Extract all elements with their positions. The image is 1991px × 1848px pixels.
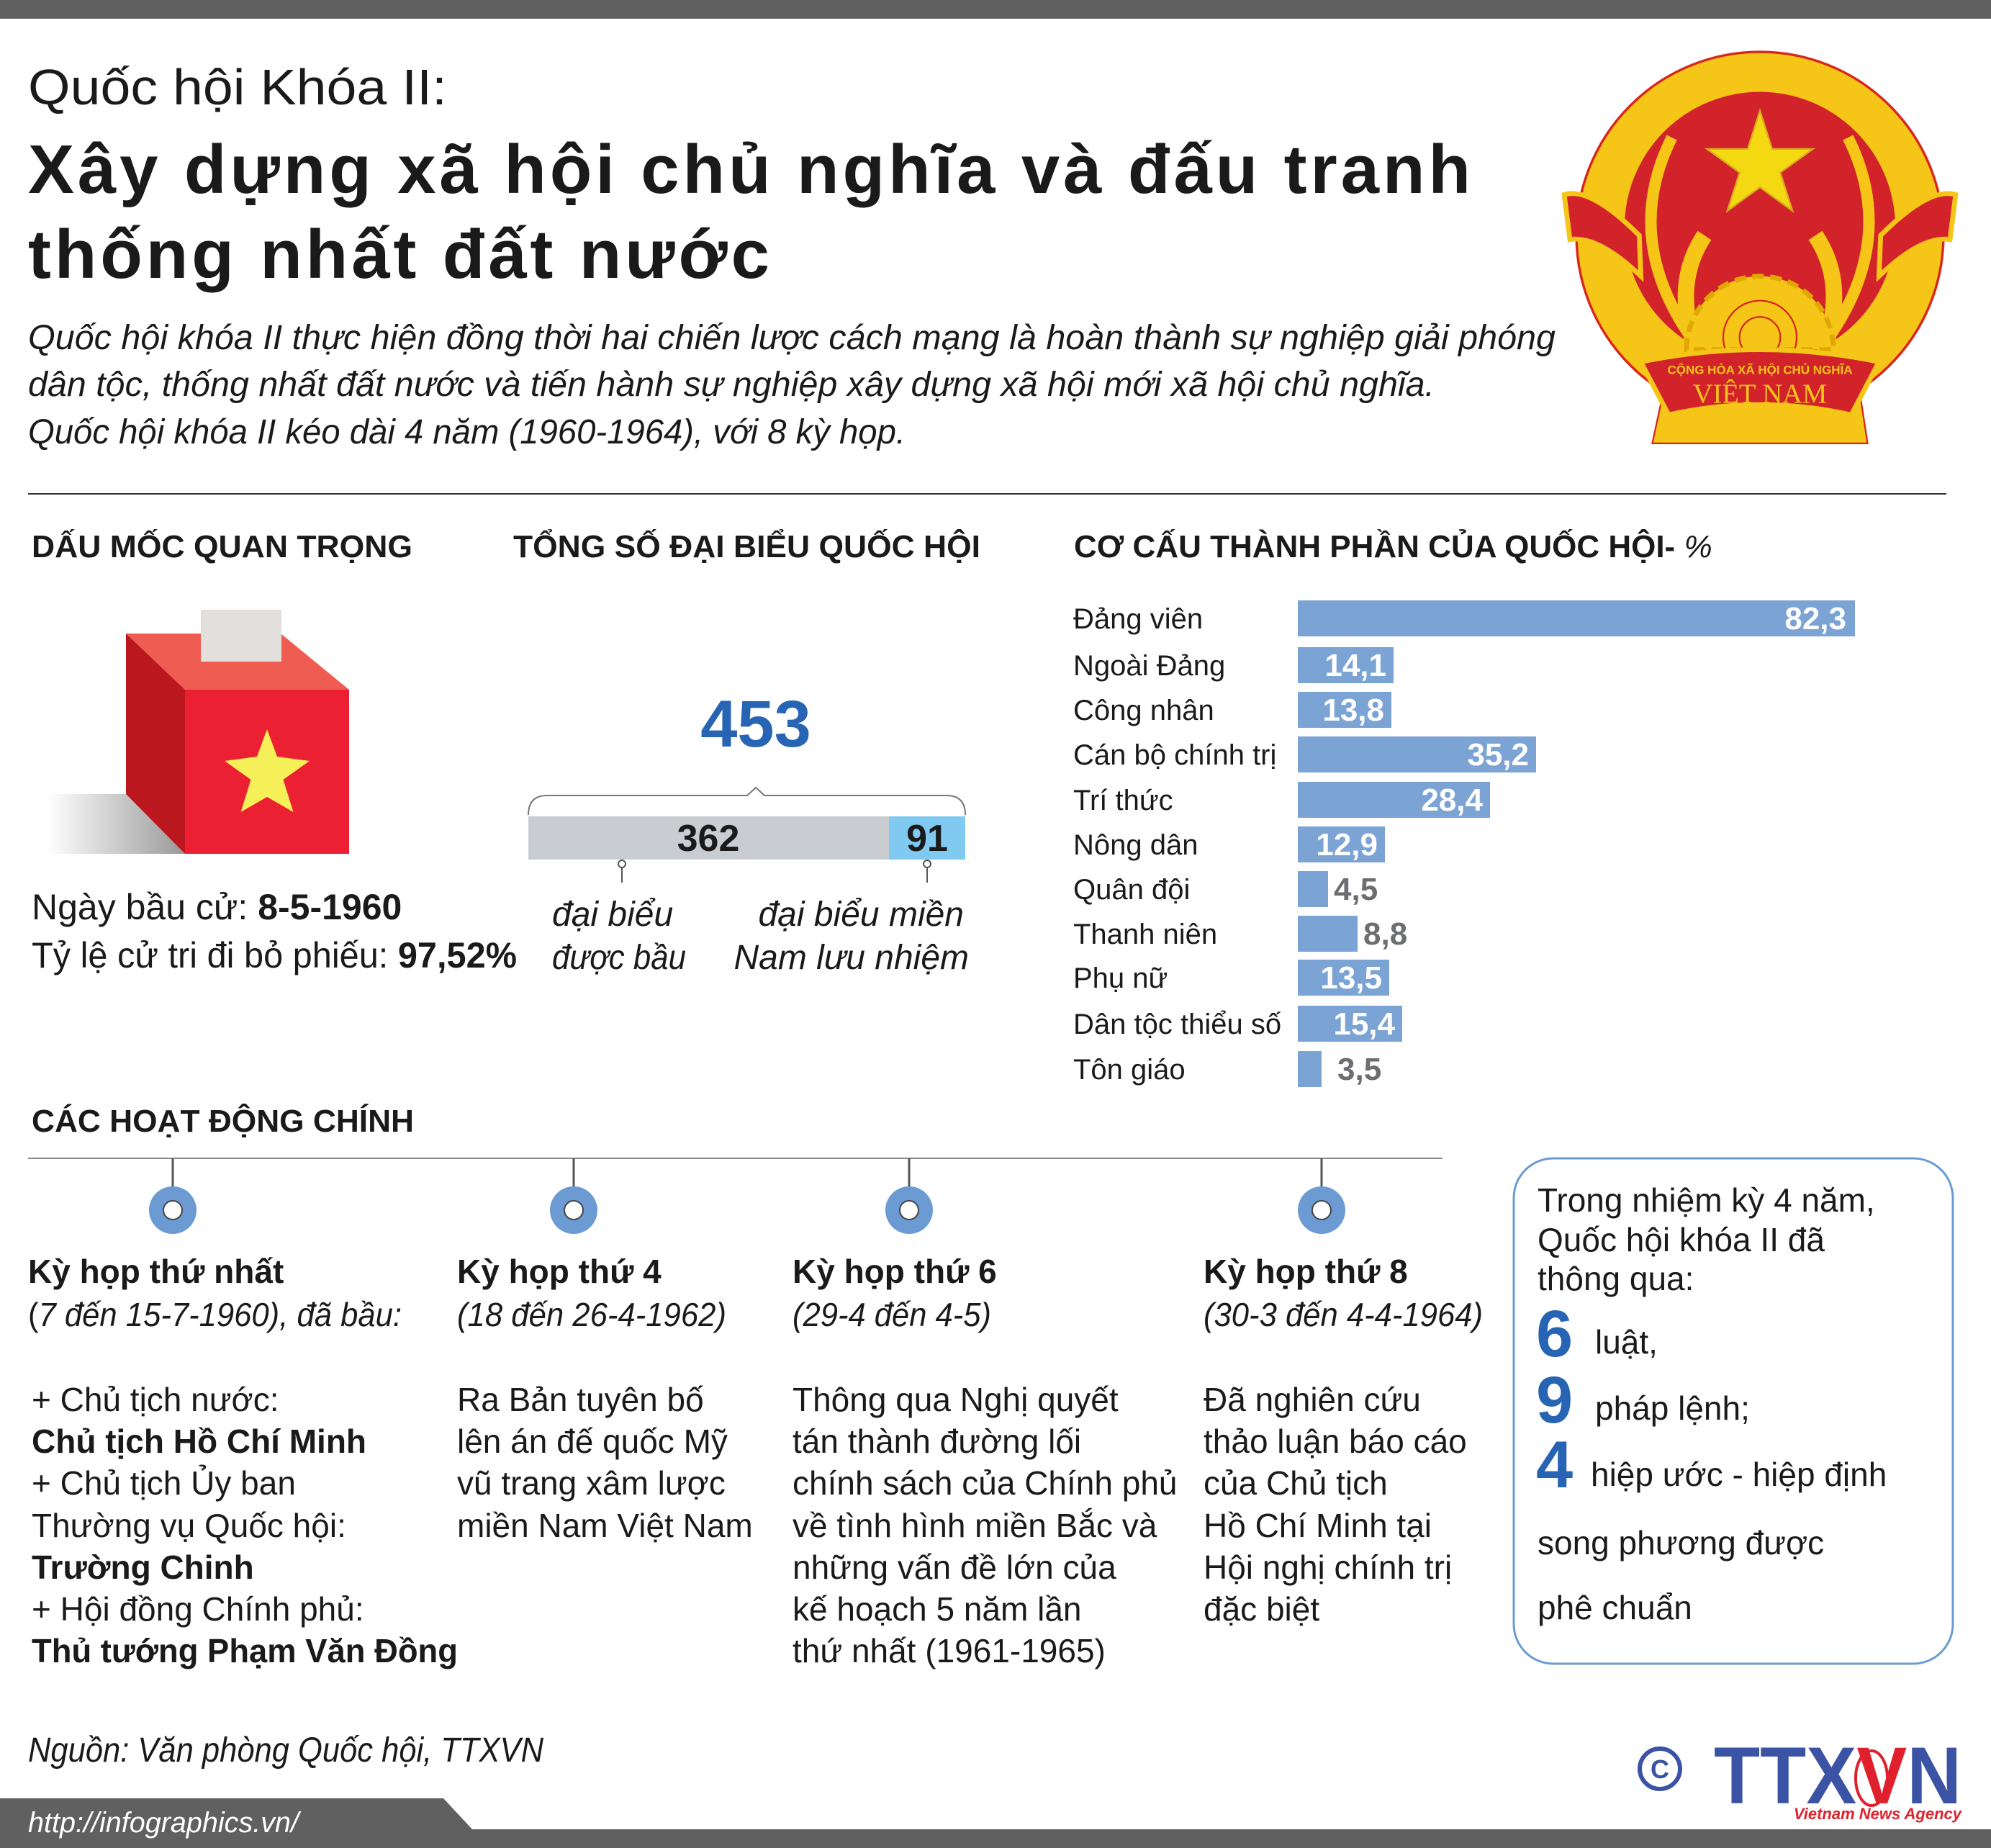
total deputies chart: 453 [700, 688, 811, 761]
total deputies chart: 362 [677, 818, 739, 860]
bar chart: composition: Nông dân [1073, 829, 1198, 861]
session 8: thảo luận báo cáo [1204, 1423, 1467, 1460]
session 6: Thông qua Nghị quyết [793, 1381, 1119, 1418]
callout: laws passed: Trong nhiệm kỳ 4 năm, [1538, 1181, 1875, 1219]
bar chart: composition [1073, 600, 1855, 1087]
callout: laws passed: 9 [1536, 1364, 1573, 1437]
callout: laws passed: pháp lệnh; [1595, 1389, 1750, 1427]
bar chart: composition: 15,4 [1333, 1006, 1396, 1042]
bar chart: composition: Cán bộ chính trị [1073, 739, 1276, 771]
bar chart: composition: 4,5 [1334, 872, 1378, 907]
session 6: thứ nhất (1961-1965) [793, 1632, 1106, 1669]
session 8: Hồ Chí Minh tại [1204, 1507, 1432, 1544]
session 4: miền Nam Việt Nam [457, 1507, 753, 1544]
icon: national emblem [1564, 52, 1956, 443]
callout: laws passed: song phương được [1538, 1524, 1824, 1561]
bar chart: composition: Trí thức [1073, 785, 1173, 816]
session 4: (18 đến 26-4-1962) [457, 1296, 726, 1333]
heading: milestones: DẤU MỐC QUAN TRỌNG [32, 528, 412, 564]
session 1: Kỳ họp thứ nhất [28, 1253, 284, 1290]
election facts [32, 887, 517, 975]
footer bar with url: http://infographics.vn/ [28, 1807, 302, 1839]
bar chart: composition: 35,2 [1467, 737, 1529, 772]
bar chart: composition: Phụ nữ [1073, 963, 1168, 994]
callout: laws passed: thông qua: [1538, 1260, 1694, 1297]
session 4: vũ trang xâm lược [457, 1464, 726, 1502]
total deputies chart [528, 688, 969, 977]
session 6: (29-4 đến 4-5) [793, 1296, 991, 1333]
election facts: Ngày bầu cử: 8-5-1960 [32, 887, 402, 927]
session 4: lên án đế quốc Mỹ [457, 1423, 728, 1460]
total deputies chart: đại biểu [552, 896, 673, 934]
heading: total deputies: TỔNG SỐ ĐẠI BIỂU QUỐC HỘI [513, 528, 980, 564]
intro text: dân tộc, thống nhất đất nước và tiến hành sự nghiệp xây dựng xã hội mới xã hội chủ nghĩa. [28, 366, 1435, 404]
callout: laws passed: 4 [1536, 1428, 1573, 1502]
session 8: (30-3 đến 4-4-1964) [1204, 1296, 1483, 1333]
title: Quốc hội Khóa II: [28, 59, 447, 115]
session 6: tán thành đường lối [793, 1423, 1081, 1460]
session 8: Hội nghị chính trị [1204, 1549, 1452, 1586]
bar chart: composition: 13,5 [1320, 960, 1382, 996]
session 1: Thủ tướng Phạm Văn Đồng [32, 1632, 458, 1669]
logo: TTXVN: Vietnam News Agency [1794, 1805, 1963, 1823]
intro text: Quốc hội khóa II kéo dài 4 năm (1960-1964), với 8 kỳ họp. [28, 413, 906, 451]
session 1: Thường vụ Quốc hội: [32, 1507, 346, 1544]
bar chart: composition: 82,3 [1784, 601, 1846, 636]
session 6: những vấn đề lớn của [793, 1549, 1116, 1586]
session 4 [457, 1253, 753, 1544]
session 1: Trường Chinh [32, 1549, 254, 1586]
callout: laws passed: phê chuẩn [1538, 1589, 1692, 1626]
total deputies chart: 91 [906, 818, 948, 860]
session 1: (7 đến 15-7-1960), đã bầu: [28, 1296, 402, 1333]
callout: laws passed [1514, 1158, 1953, 1664]
timeline [28, 1158, 1443, 1234]
session 6: Kỳ họp thứ 6 [793, 1253, 997, 1290]
title: Xây dựng xã hội chủ nghĩa và đấu tranh [28, 131, 1471, 208]
session 1: Chủ tịch Hồ Chí Minh [32, 1423, 366, 1460]
session 1: + Chủ tịch Ủy ban [32, 1464, 296, 1502]
heading: composition: CƠ CẤU THÀNH PHẦN CỦA QUỐC HỘI- % [1074, 528, 1712, 564]
session 6: kế hoạch 5 năm lần [793, 1590, 1081, 1628]
session 8: Đã nghiên cứu [1204, 1381, 1421, 1418]
session 4: Kỳ họp thứ 4 [457, 1253, 662, 1290]
session 1: + Hội đồng Chính phủ: [32, 1590, 364, 1628]
bar chart: composition: 12,9 [1316, 827, 1378, 862]
intro text: Quốc hội khóa II thực hiện đồng thời hai chiến lược cách mạng là hoàn thành sự nghiệp giải phóng [28, 319, 1556, 357]
total deputies chart: Nam lưu nhiệm [733, 939, 969, 977]
session 4: Ra Bản tuyên bố [457, 1381, 704, 1418]
bar chart: composition: Quân đội [1073, 874, 1190, 906]
bar chart: composition: Thanh niên [1073, 919, 1217, 950]
session 6 [793, 1253, 1177, 1669]
heading: main activities: CÁC HOẠT ĐỘNG CHÍNH [32, 1102, 414, 1139]
bar chart: composition: Ngoài Đảng [1073, 650, 1225, 682]
total deputies chart: đại biểu miền [758, 896, 964, 934]
session 1 [28, 1253, 458, 1669]
bar chart: composition: 14,1 [1324, 648, 1386, 683]
session 8: Kỳ họp thứ 8 [1204, 1253, 1408, 1290]
logo: TTXVN: TTXVN [1714, 1731, 1961, 1821]
footer bar with url [0, 1798, 1991, 1848]
logo: TTXVN: C [1651, 1754, 1669, 1784]
session 8 [1204, 1253, 1483, 1628]
session 8: đặc biệt [1204, 1590, 1319, 1628]
session 1: + Chủ tịch nước: [32, 1381, 279, 1418]
bar chart: composition: Công nhân [1073, 695, 1214, 726]
icon: national emblem: VIỆT NAM [1693, 379, 1827, 409]
session 6: về tình hình miền Bắc và [793, 1507, 1157, 1544]
session 6: chính sách của Chính phủ [793, 1464, 1177, 1502]
election facts: Tỷ lệ cử tri đi bỏ phiếu: 97,52% [32, 935, 517, 975]
callout: laws passed: luật, [1595, 1323, 1658, 1361]
icon: ballot box [47, 610, 349, 854]
callout: laws passed: 6 [1536, 1297, 1573, 1371]
bar chart: composition: Dân tộc thiểu số [1073, 1009, 1281, 1040]
title [28, 59, 1471, 293]
intro text [28, 319, 1556, 451]
bar chart: composition: 3,5 [1337, 1052, 1381, 1087]
source: Nguồn: Văn phòng Quốc hội, TTXVN [28, 1731, 543, 1770]
bar chart: composition: 13,8 [1322, 693, 1384, 728]
bar chart: composition: Tôn giáo [1073, 1054, 1186, 1086]
callout: laws passed: hiệp ước - hiệp định [1591, 1456, 1887, 1493]
bar chart: composition: 8,8 [1363, 916, 1407, 952]
total deputies chart: được bầu [552, 939, 686, 977]
session 8: của Chủ tịch [1204, 1464, 1388, 1502]
bar chart: composition: 28,4 [1421, 783, 1484, 818]
bar chart: composition: Đảng viên [1073, 603, 1203, 635]
icon: national emblem: CỘNG HÒA XÃ HỘI CHỦ NGHĨA [1668, 363, 1852, 377]
callout: laws passed: Quốc hội khóa II đã [1538, 1221, 1825, 1258]
title: thống nhất đất nước [28, 216, 769, 293]
